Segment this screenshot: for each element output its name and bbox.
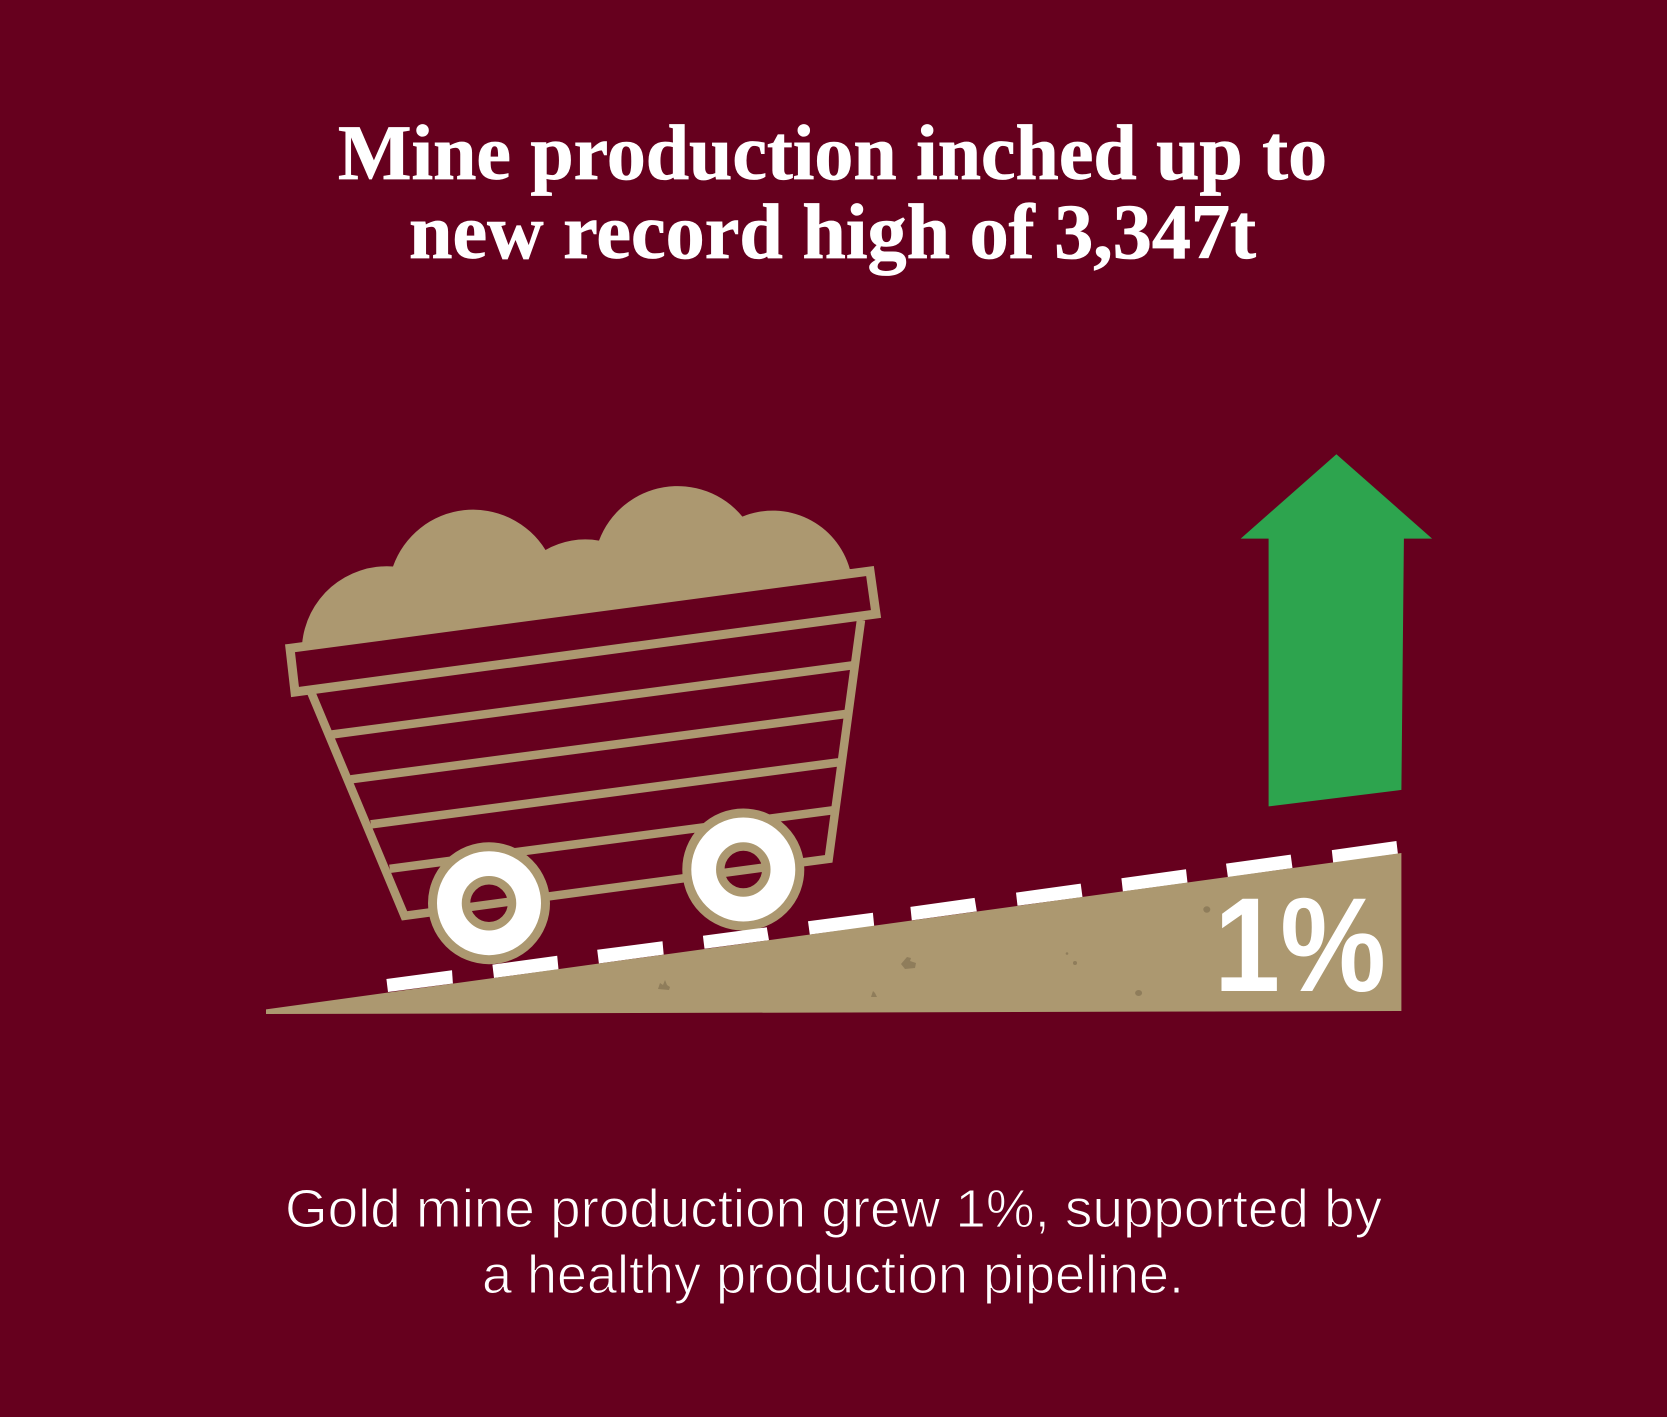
- green up arrow: [1241, 454, 1432, 806]
- caption: [285, 1179, 1382, 1305]
- track sleepers: [386, 841, 1398, 992]
- title: [338, 109, 1327, 275]
- caption: a healthy production pipeline.: [482, 1245, 1184, 1305]
- mine cart illustration: [290, 486, 876, 960]
- percentage label: 1%: [1214, 871, 1386, 1020]
- title: Mine production inched up to: [338, 109, 1327, 196]
- ramp specks: [658, 906, 1210, 997]
- front wheel: [687, 813, 800, 926]
- ramp: [266, 853, 1401, 1014]
- ore pile: [290, 486, 870, 648]
- rear wheel: [432, 847, 546, 960]
- title: new record high of 3,347t: [409, 188, 1256, 275]
- cart rim: [290, 571, 876, 692]
- cart body: [311, 620, 861, 916]
- caption: Gold mine production grew 1%, supported by: [285, 1179, 1382, 1239]
